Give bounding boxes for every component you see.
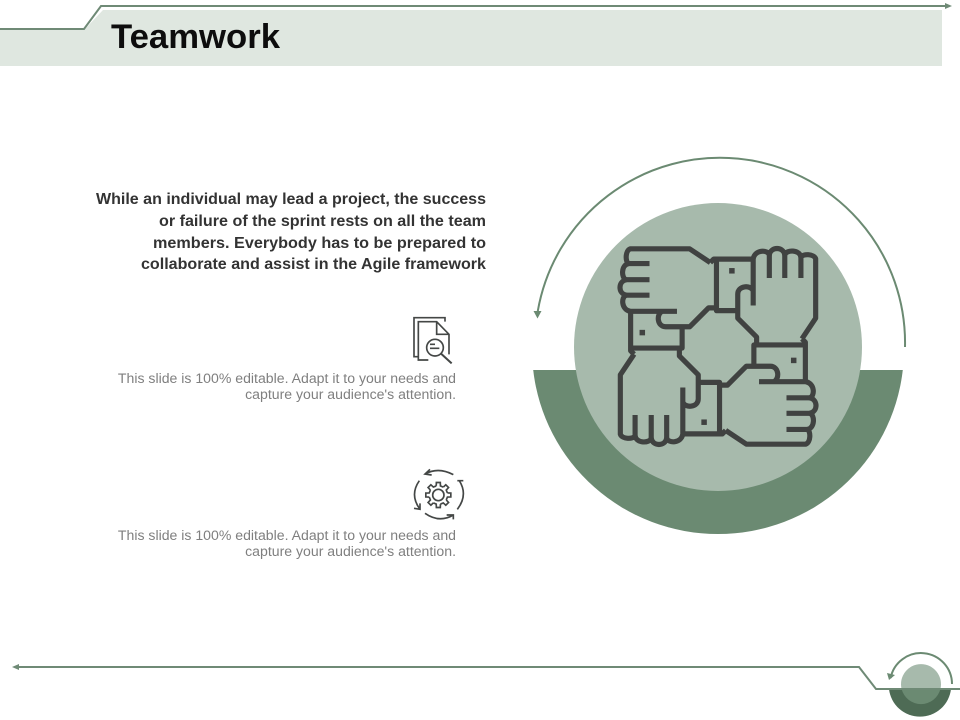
footer circular badge <box>876 653 960 717</box>
header band <box>0 10 942 66</box>
text block 1 <box>118 370 456 402</box>
icon: gear with circular arrows <box>414 469 463 519</box>
text block 2: capture your audience's attention. <box>245 543 456 559</box>
intro paragraph: collaborate and assist in the Agile framework <box>141 256 486 273</box>
intro paragraph: While an individual may lead a project, the success <box>96 191 486 208</box>
circular graphic <box>533 158 905 534</box>
intro paragraph: members. Everybody has to be prepared to <box>153 235 486 252</box>
text block 1: capture your audience's attention. <box>245 386 456 402</box>
text block 1: This slide is 100% editable. Adapt it to your needs and <box>118 370 456 386</box>
light circle <box>574 203 862 491</box>
dark half disc <box>533 370 903 534</box>
footer arrow line <box>12 664 889 689</box>
title: Teamwork <box>111 18 280 56</box>
intro paragraph <box>96 191 486 273</box>
text block 2: This slide is 100% editable. Adapt it to your needs and <box>118 527 456 543</box>
text block 2 <box>118 527 456 559</box>
icon: document with magnifier <box>414 318 452 363</box>
icon: four interlocked hands <box>620 248 816 445</box>
header arrow line <box>0 3 952 29</box>
intro paragraph: or failure of the sprint rests on all the team <box>159 213 486 230</box>
arc arrow <box>534 158 905 347</box>
